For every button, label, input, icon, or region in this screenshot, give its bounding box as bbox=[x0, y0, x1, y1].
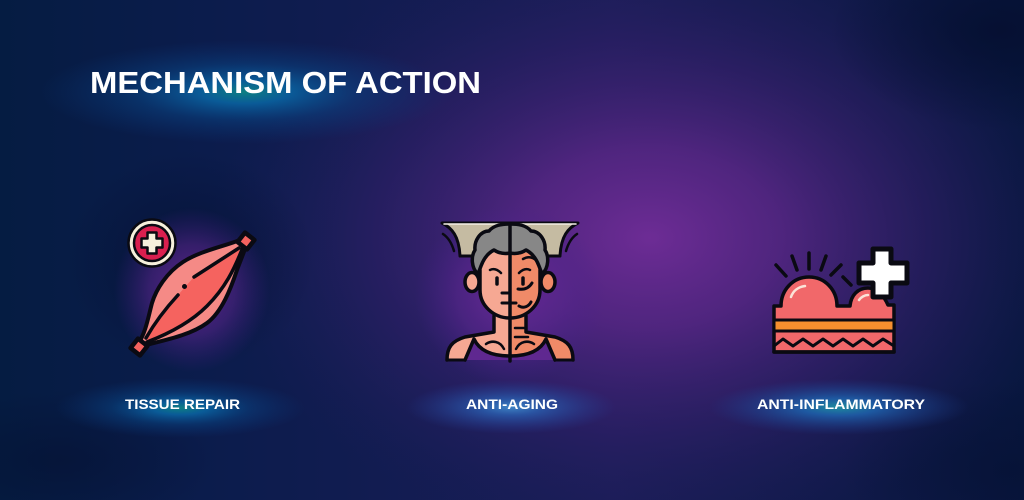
plus sign bbox=[859, 249, 907, 297]
wrinkles and mouth bbox=[502, 283, 532, 307]
wavy line bbox=[774, 339, 894, 346]
icon: inflamed skin with plus bbox=[774, 249, 907, 352]
label glow bbox=[709, 379, 969, 435]
label: ANTI-INFLAMMATORY bbox=[757, 396, 926, 412]
shoulders and torso bbox=[447, 312, 573, 360]
tank top bbox=[465, 339, 555, 360]
central divider bbox=[508, 224, 512, 361]
label glow bbox=[55, 378, 305, 438]
panel: anti-aging bbox=[406, 205, 616, 434]
title glow bbox=[40, 40, 450, 144]
icon: muscle with plus badge bbox=[114, 208, 270, 372]
label: ANTI-AGING bbox=[466, 396, 558, 412]
face bbox=[480, 250, 510, 318]
inflammation rays bbox=[776, 253, 851, 285]
hair bbox=[472, 224, 548, 274]
panel: anti-inflammatory bbox=[709, 249, 969, 435]
ears bbox=[465, 272, 479, 292]
highlights bbox=[791, 286, 868, 300]
title: MECHANISM OF ACTION bbox=[90, 66, 481, 100]
backdrop mirror frame bbox=[442, 223, 578, 256]
label glow bbox=[406, 380, 616, 434]
badge: red cross bbox=[128, 220, 176, 266]
panel: tissue repair bbox=[55, 208, 305, 438]
label: TISSUE REPAIR bbox=[125, 396, 240, 412]
skin swelling bbox=[774, 277, 894, 352]
eyes and brows bbox=[490, 257, 537, 273]
icon: half young, half aged face bbox=[415, 205, 605, 385]
tendons bbox=[238, 233, 254, 249]
muscle belly bbox=[131, 233, 254, 355]
orange tissue layer bbox=[774, 320, 894, 331]
